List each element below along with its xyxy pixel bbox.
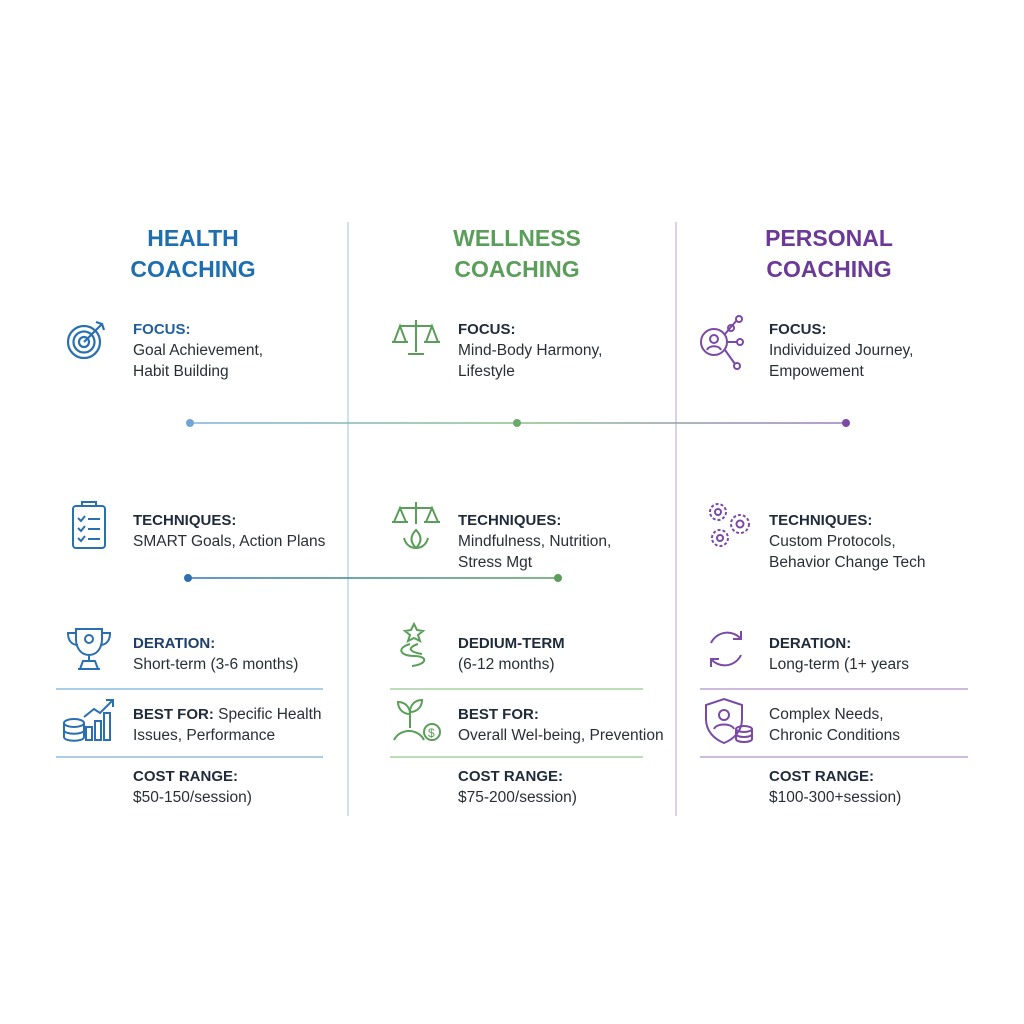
text: personal techniques: Behavior Change Tech — [769, 554, 926, 571]
heading: health coaching — [130, 225, 256, 282]
heading: wellness coaching — [453, 225, 581, 282]
heading: health coaching: COACHING — [130, 256, 256, 282]
text: wellness focus: FOCUS: — [458, 321, 516, 338]
text: personal focus — [769, 321, 913, 380]
text: wellness techniques: Mindfulness, Nutrition, — [458, 533, 611, 550]
text: wellness focus: Lifestyle — [458, 363, 515, 380]
text: health duration: Short-term (3-6 months) — [133, 656, 298, 673]
text: personal best for: Complex Needs, — [769, 706, 884, 723]
icon: target — [66, 321, 105, 360]
text: health duration — [133, 635, 298, 673]
column dividers — [347, 222, 348, 816]
heading: wellness coaching: COACHING — [454, 256, 580, 282]
icon: gears — [709, 503, 750, 547]
text: wellness duration: (6-12 months) — [458, 656, 554, 673]
text: personal techniques — [769, 512, 926, 571]
text: wellness techniques: TECHNIQUES: — [458, 512, 561, 529]
text: personal focus: FOCUS: — [769, 321, 826, 338]
text: personal techniques: TECHNIQUES: — [769, 512, 872, 529]
text: personal duration: Long-term (1+ years — [769, 656, 909, 673]
icon: sprout coin: $ — [428, 726, 435, 740]
heading: personal coaching: COACHING — [766, 256, 892, 282]
text: health techniques — [133, 512, 325, 550]
text: wellness best for: Overall Wel-being, Prevention — [458, 727, 664, 744]
text: wellness cost — [458, 768, 577, 806]
icon: coins chart — [63, 699, 114, 742]
text: health best for: BEST FOR: Specific Health — [133, 706, 322, 723]
text: health duration: DERATION: — [133, 635, 215, 652]
text: wellness cost: $75-200/session) — [458, 789, 577, 806]
text: personal best for: Chronic Conditions — [769, 727, 900, 744]
text: wellness techniques: Stress Mgt — [458, 554, 532, 571]
icon: scales lotus — [392, 502, 440, 550]
text: health cost — [133, 768, 252, 806]
icon: network person — [700, 315, 744, 370]
text: health focus — [133, 321, 263, 380]
text: health cost: $50-150/session) — [133, 789, 252, 806]
text: health focus: Goal Achievement, — [133, 342, 263, 359]
text: personal cost: $100-300+session) — [769, 789, 901, 806]
text: personal focus: Individuized Journey, — [769, 342, 913, 359]
heading: health coaching: HEALTH — [147, 225, 239, 251]
icon: scales — [392, 320, 440, 355]
text: health techniques: SMART Goals, Action Plans — [133, 533, 325, 550]
text: health best for: Issues, Performance — [133, 727, 275, 744]
heading: wellness coaching: WELLNESS — [453, 225, 581, 251]
text: health focus: FOCUS: — [133, 321, 190, 338]
icon: winding path star — [400, 622, 426, 667]
text: wellness focus — [458, 321, 602, 380]
icon: sprout coin — [393, 699, 441, 741]
heading: personal coaching: PERSONAL — [765, 225, 893, 251]
text: health best for — [133, 706, 322, 744]
text: wellness duration: DEDIUM-TERM — [458, 635, 565, 652]
text: personal techniques: Custom Protocols, — [769, 533, 896, 550]
icon: shield coins — [705, 698, 753, 744]
text: wellness duration — [458, 635, 565, 673]
text: wellness cost: COST RANGE: — [458, 768, 563, 785]
icon: refresh arrows — [710, 631, 742, 667]
heading: personal coaching — [765, 225, 893, 282]
text: wellness techniques — [458, 512, 611, 571]
text: personal duration — [769, 635, 909, 673]
text: personal cost: COST RANGE: — [769, 768, 874, 785]
text: personal cost — [769, 768, 901, 806]
text: personal best for — [769, 706, 900, 744]
icon: trophy — [67, 628, 111, 670]
text: health techniques: TECHNIQUES: — [133, 512, 236, 529]
text: personal focus: Empowement — [769, 363, 864, 380]
text: health cost: COST RANGE: — [133, 768, 238, 785]
icon: clipboard — [72, 501, 106, 549]
text: wellness best for: BEST FOR: — [458, 706, 539, 723]
text: personal duration: DERATION: — [769, 635, 851, 652]
text: wellness best for — [458, 706, 664, 744]
text: health focus: Habit Building — [133, 363, 229, 380]
text: wellness focus: Mind-Body Harmony, — [458, 342, 602, 359]
